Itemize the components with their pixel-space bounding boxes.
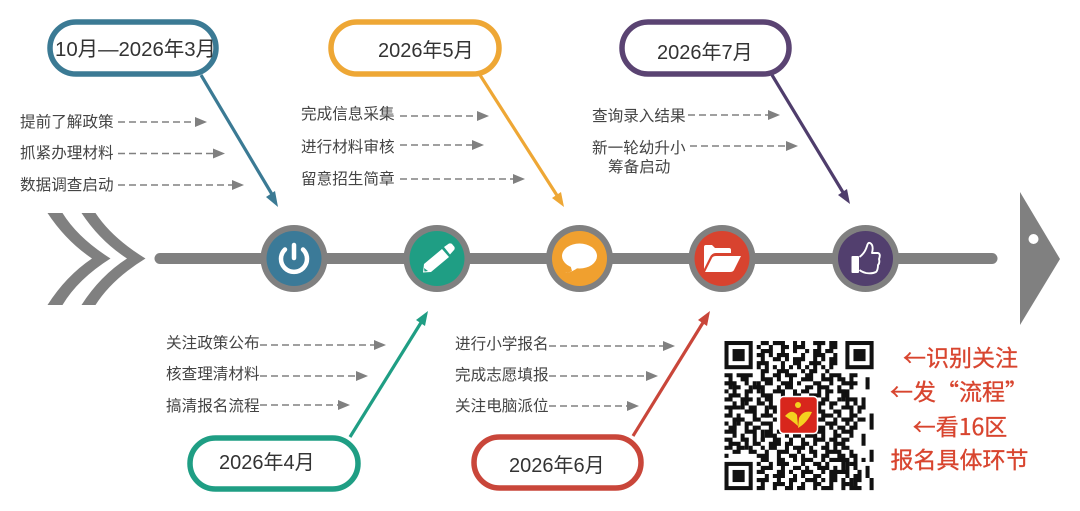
task list: May 2026: 进行材料审核 xyxy=(301,138,395,156)
callout: May 2026 xyxy=(331,22,499,74)
task list: Oct to March: 数据调查启动 xyxy=(20,176,114,194)
milestone icon: pencil xyxy=(404,225,470,292)
task list: April 2026: 关注政策公布 xyxy=(166,334,260,352)
QR centre logo xyxy=(780,396,818,434)
connector arrow: April 2026 xyxy=(350,311,428,437)
task list: May 2026: 留意招生简章 xyxy=(301,169,395,188)
task list: July 2026: 查询录入结果 xyxy=(592,107,686,125)
icon: end arrowhead xyxy=(1020,192,1060,325)
task list: July 2026 xyxy=(592,107,798,176)
callout: April 2026: 2026年4月 xyxy=(219,451,315,474)
callout: Oct to March: 10月—2026年3月 xyxy=(55,38,216,61)
timeline axis bar xyxy=(160,253,992,264)
task list: April 2026: 核查理清材料 xyxy=(166,365,260,383)
task list: July 2026: 新一轮幼升小 xyxy=(592,139,686,157)
callout: June 2026 xyxy=(474,437,641,488)
task list: June 2026: 关注电脑派位 xyxy=(455,397,549,415)
milestone icon: speech bubble xyxy=(546,225,613,292)
callout: July 2026 xyxy=(622,22,789,74)
connector arrow: July 2026 xyxy=(772,75,850,204)
call to action text: ←发“流程” xyxy=(890,373,1028,407)
task list: Oct to March: 抓紧办理材料 xyxy=(20,144,114,162)
callout: June 2026: 2026年6月 xyxy=(509,454,605,477)
task list: April 2026 xyxy=(166,334,386,415)
task list: June 2026 xyxy=(455,335,675,415)
connector arrow: Oct to March xyxy=(201,75,278,207)
task list: June 2026: 进行小学报名 xyxy=(455,335,549,353)
task list: April 2026: 搞清报名流程 xyxy=(166,397,260,415)
connector arrow: May 2026 xyxy=(480,75,564,207)
task list: Oct to March xyxy=(20,113,244,194)
milestone icon: thumbs up xyxy=(832,225,899,292)
call to action text: ←识别关注 xyxy=(903,339,1018,373)
milestone icon: power xyxy=(260,225,328,292)
task list: May 2026: 完成信息采集 xyxy=(301,105,395,123)
task list: July 2026: 筹备启动 xyxy=(608,158,670,176)
milestone icon: folder xyxy=(688,225,756,292)
callout: May 2026: 2026年5月 xyxy=(378,39,474,62)
callout: Oct to March xyxy=(50,22,216,74)
call to action text: 报名具体环节 xyxy=(890,441,1028,475)
call to action text: ←看16区 xyxy=(913,408,1007,442)
callout: July 2026: 2026年7月 xyxy=(657,41,753,64)
icon: double chevron start xyxy=(48,213,146,305)
QR code xyxy=(724,343,872,490)
task list: Oct to March: 提前了解政策 xyxy=(20,113,114,131)
connector arrow: June 2026 xyxy=(633,311,710,436)
callout: April 2026 xyxy=(190,438,358,489)
task list: May 2026 xyxy=(301,105,525,188)
call to action text xyxy=(890,339,1028,475)
task list: June 2026: 完成志愿填报 xyxy=(455,366,549,384)
